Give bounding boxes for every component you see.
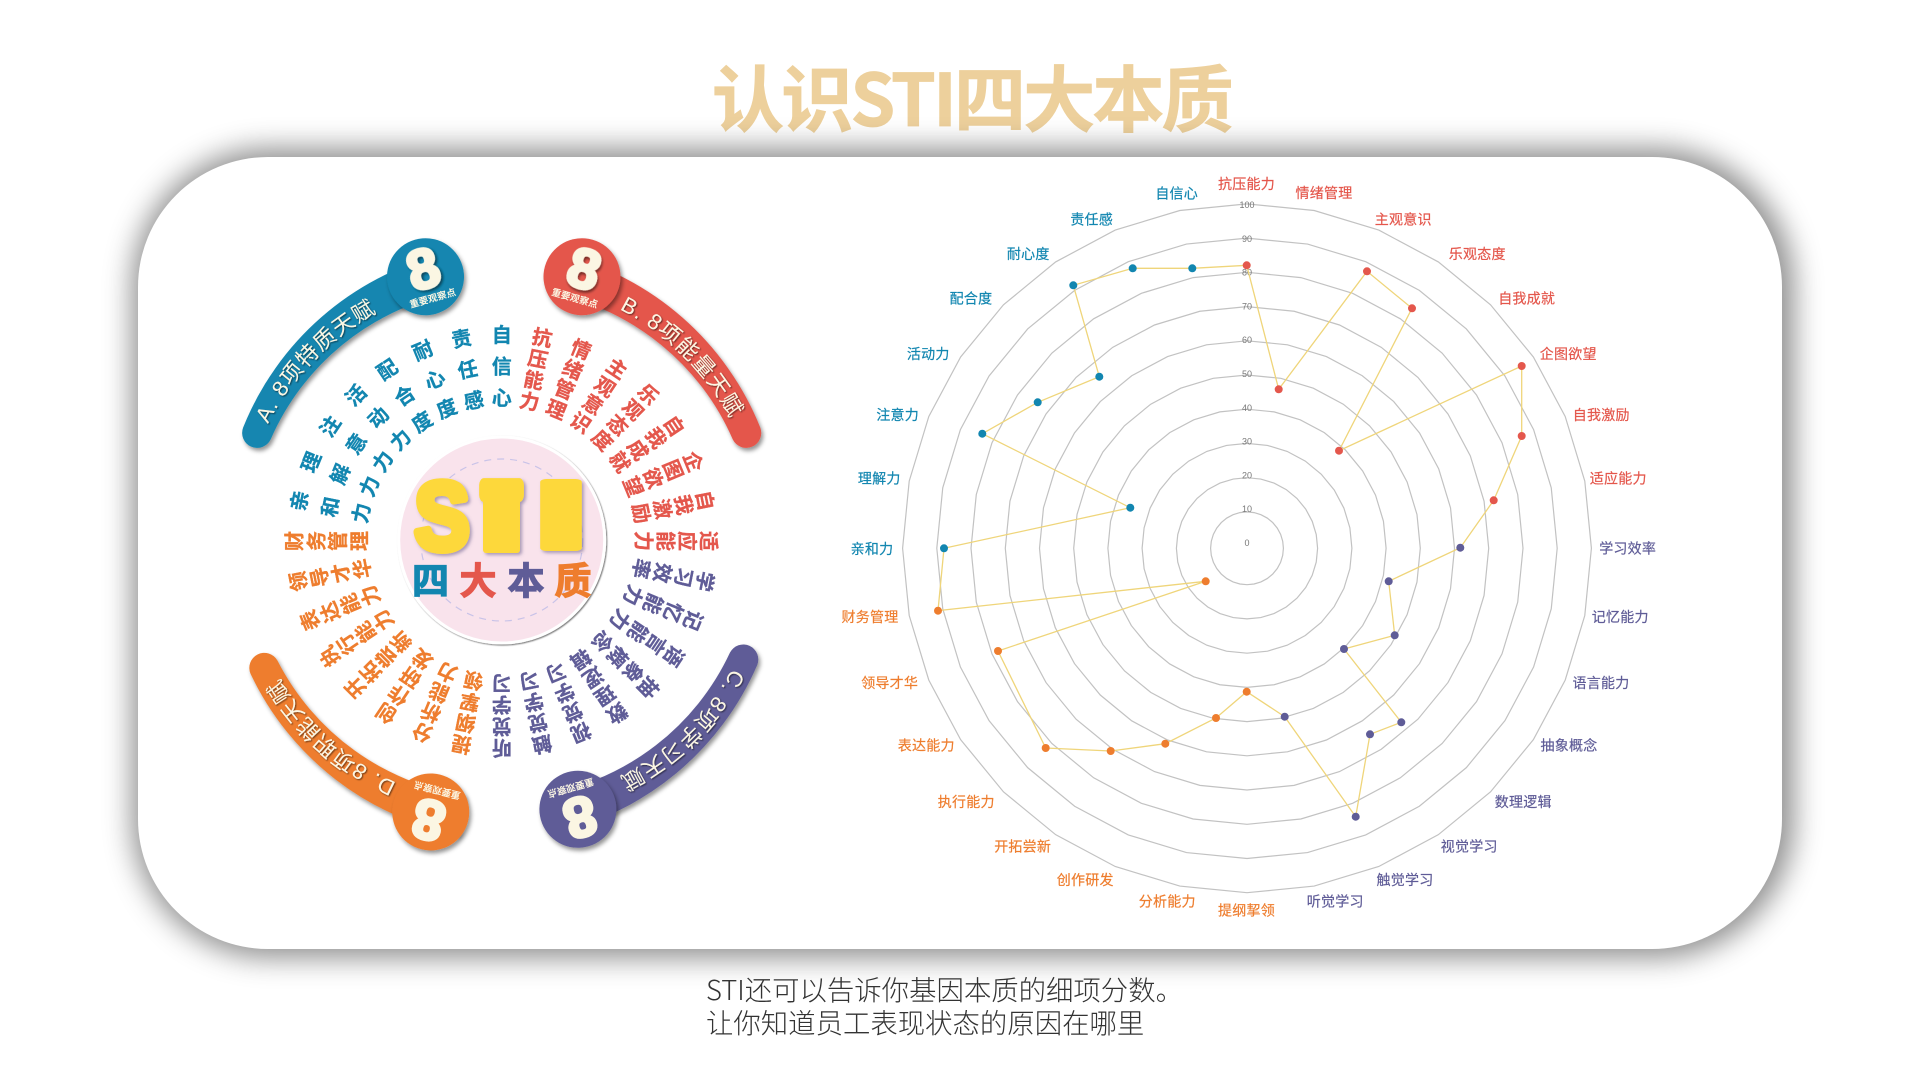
radar axis labels: orange group: 提纲挈领: [1218, 903, 1275, 919]
radial text: B 8项能量天赋 items: [517, 324, 720, 551]
radial text: A 8项特质天赋 items: 自信心: [492, 324, 512, 410]
title: 认识STI四大本质: [712, 42, 1231, 147]
badge B: 重要观察点: [550, 286, 600, 311]
radar tick labels: 0: [1244, 538, 1250, 548]
band C: 8项学习天赋 with badge: [538, 644, 763, 854]
radial text: A 8项特质天赋 items: 耐心度: [409, 337, 461, 424]
badge C: 重要观察点: [546, 775, 595, 800]
radial text: A 8项特质天赋 items: 配合度: [373, 356, 437, 438]
radar axis labels: purple group: 视觉学习: [1441, 839, 1498, 855]
STI letters: I: [533, 462, 589, 569]
radar axis labels: purple group: [1307, 541, 1656, 909]
radar axis labels: blue group: 配合度: [950, 290, 992, 306]
radar axis labels: orange group: 创作研发: [1057, 872, 1114, 888]
radar rings: [903, 204, 1591, 893]
radial text: C 8项学习天赋 items: 听觉学习: [492, 671, 512, 759]
radar tick labels: 90: [1242, 234, 1252, 244]
badge B: [534, 228, 630, 324]
radar axis labels: purple group: 数理逻辑: [1495, 794, 1552, 810]
band A: 8项特质天赋 with badge: [242, 234, 469, 454]
badge D: [384, 765, 477, 860]
arc B: [554, 254, 761, 448]
radial text: B 8项能量天赋 items: 情绪管理: [542, 336, 594, 425]
radar axis labels: orange group: [842, 609, 1275, 919]
radar axis labels: red group: 自我成就: [1498, 290, 1555, 306]
radar points: learning (purple): [1281, 544, 1464, 821]
radial text: D 8项职能天赋 items: 创作研发: [372, 644, 438, 728]
radial text: D 8项职能天赋 items: [284, 531, 486, 757]
radar axis labels: blue group: [851, 185, 1198, 557]
radial text: D 8项职能天赋 items: 领导才华: [286, 557, 376, 593]
badge A: [377, 228, 473, 324]
四大本质 text: 本: [508, 551, 544, 605]
radial text: C 8项学习天赋 items: 记忆能力: [618, 582, 707, 634]
radar chart: [842, 176, 1656, 919]
radial text: B 8项能量天赋 items: 乐观态度: [587, 380, 663, 456]
center medallion: STI 四大本质: [399, 437, 605, 643]
radar axis labels: red group: 乐观态度: [1449, 246, 1506, 262]
radar tick labels: 20: [1242, 470, 1252, 480]
radial text: D 8项职能天赋 items: 分析能力: [409, 657, 461, 746]
radial text: B 8项能量天赋 items: 自我激励: [627, 489, 717, 525]
radar tick labels: [1239, 200, 1255, 548]
radar axis labels: orange group: 执行能力: [938, 794, 995, 810]
radial text: C 8项学习天赋 items: [492, 557, 717, 759]
radial text: B 8项能量天赋 items: 主观意识: [566, 354, 631, 438]
radar axis labels: red group: 适应能力: [1590, 470, 1647, 486]
四大本质 text: 质: [554, 551, 592, 605]
arc A: [242, 254, 449, 448]
arc C: [547, 639, 759, 838]
arc B label: B. 8项能量天赋: [621, 296, 746, 420]
badge C: 8: [557, 783, 604, 852]
radial text: A 8项特质天赋 items: [287, 324, 512, 525]
radar tick labels: 100: [1239, 200, 1255, 210]
radar score line: [938, 265, 1522, 817]
radar tick labels: 70: [1242, 301, 1252, 311]
radar axis labels: orange group: 领导才华: [861, 675, 918, 691]
radial text: D 8项职能天赋 items: 表达能力: [296, 582, 385, 634]
radar axis labels: red group: 主观意识: [1375, 211, 1432, 227]
radar axis labels: orange group: 表达能力: [898, 737, 955, 753]
radial text: A 8项特质天赋 items: 注意力: [316, 412, 398, 477]
radar points: energy (red): [1243, 261, 1526, 504]
radar axis labels: purple group: 听觉学习: [1307, 893, 1364, 909]
band D: 8项职能天赋 with badge: [248, 652, 474, 856]
radar axis labels: orange group: 财务管理: [842, 609, 898, 625]
四大本质 text: 四: [412, 551, 449, 605]
caption text: STI还可以告诉你基因本质的细项分数。: [706, 968, 1183, 1008]
radial text: C 8项学习天赋 items: 数理逻辑: [566, 644, 631, 728]
radar tick labels: 40: [1242, 403, 1252, 413]
arc C label: C. 8项学习天赋: [620, 672, 744, 794]
radar points: traits (blue): [940, 264, 1196, 552]
medallion circle: [399, 437, 605, 643]
radial text: C 8项学习天赋 items: 语言能力: [604, 605, 689, 670]
STI letters: [414, 462, 589, 569]
radar axis labels: blue group: 亲和力: [851, 541, 893, 557]
radar tick labels: 30: [1242, 437, 1252, 447]
radar axis labels: red group: [1218, 176, 1647, 486]
radar axis labels: red group: 企图欲望: [1540, 346, 1597, 362]
radar axis labels: blue group: 注意力: [876, 407, 919, 423]
radial text: C 8项学习天赋 items: 抽象概念: [587, 626, 663, 702]
radar axis labels: red group: 抗压能力: [1218, 176, 1275, 192]
radar axis labels: blue group: 自信心: [1155, 185, 1198, 201]
STI letters: S: [414, 462, 470, 569]
radar axis labels: purple group: 记忆能力: [1592, 609, 1649, 625]
radial text: B 8项能量天赋 items: 自我成就: [604, 412, 689, 477]
radar axis labels: orange group: 开拓尝新: [994, 839, 1051, 855]
badge D: 重要观察点: [412, 778, 462, 801]
arc A label: A. 8项特质天赋: [258, 298, 378, 426]
arc D label: D. 8项职能天赋: [266, 679, 396, 798]
radial text: A 8项特质天赋 items: 亲和力: [287, 489, 375, 525]
radial text: C 8项学习天赋 items: 视觉学习: [542, 657, 594, 746]
radar axis labels: purple group: 抽象概念: [1540, 737, 1598, 753]
panel: white rounded card: [138, 157, 1782, 949]
radar axis labels: blue group: 活动力: [907, 346, 950, 362]
caption text: [706, 968, 1183, 1041]
radial text: D 8项职能天赋 items: 提纲挈领: [449, 667, 486, 757]
四大本质 text: [412, 551, 592, 605]
radial text: B 8项能量天赋 items: 企图欲望: [618, 448, 708, 500]
badge C: [530, 762, 626, 858]
badge A: 8: [399, 234, 447, 303]
band B: 8项能量天赋 with badge: [542, 234, 766, 454]
radial text: D 8项职能天赋 items: 开拓尝新: [341, 626, 417, 702]
radar axis labels: purple group: 语言能力: [1572, 675, 1630, 691]
radar axis labels: blue group: 责任感: [1070, 211, 1113, 227]
badge B: 8: [561, 234, 608, 303]
radar tick labels: 60: [1242, 335, 1252, 345]
badge D: 8: [406, 786, 451, 855]
radar axis labels: blue group: 耐心度: [1007, 246, 1050, 262]
四大本质 text: 大: [460, 551, 496, 605]
STI letters: T: [483, 466, 520, 565]
radial text: D 8项职能天赋 items: 执行能力: [315, 605, 399, 670]
radial text: A 8项特质天赋 items: 活动力: [341, 380, 416, 455]
caption text: 让你知道员工表现状态的原因在哪里: [706, 1001, 1144, 1041]
radar tick labels: 10: [1242, 504, 1252, 514]
radial text: B 8项能量天赋 items: 抗压能力: [517, 324, 554, 415]
radar tick labels: 80: [1242, 268, 1252, 278]
radial text: C 8项学习天赋 items: 触觉学习: [517, 667, 554, 757]
radar points: function (orange): [934, 577, 1251, 755]
radar axis labels: purple group: 学习效率: [1599, 541, 1656, 557]
radar axis labels: orange group: 分析能力: [1139, 894, 1196, 910]
arc D: [248, 641, 467, 847]
radial text: A 8项特质天赋 items: 责任感: [450, 326, 486, 414]
radial text: B 8项能量天赋 items: 适应能力: [632, 531, 720, 551]
radial text: A 8项特质天赋 items: 理解力: [298, 449, 384, 500]
radar axis labels: red group: 情绪管理: [1296, 185, 1352, 201]
radial text: D 8项职能天赋 items: 财务管理: [284, 531, 372, 551]
radar axis labels: red group: 自我激励: [1573, 407, 1630, 423]
radar axis labels: blue group: 理解力: [858, 470, 901, 486]
radar axis labels: purple group: 触觉学习: [1376, 872, 1434, 888]
radial text: C 8项学习天赋 items: 学习效率: [627, 557, 717, 593]
radar tick labels: 50: [1242, 369, 1252, 379]
badge A: 重要观察点: [408, 286, 458, 311]
